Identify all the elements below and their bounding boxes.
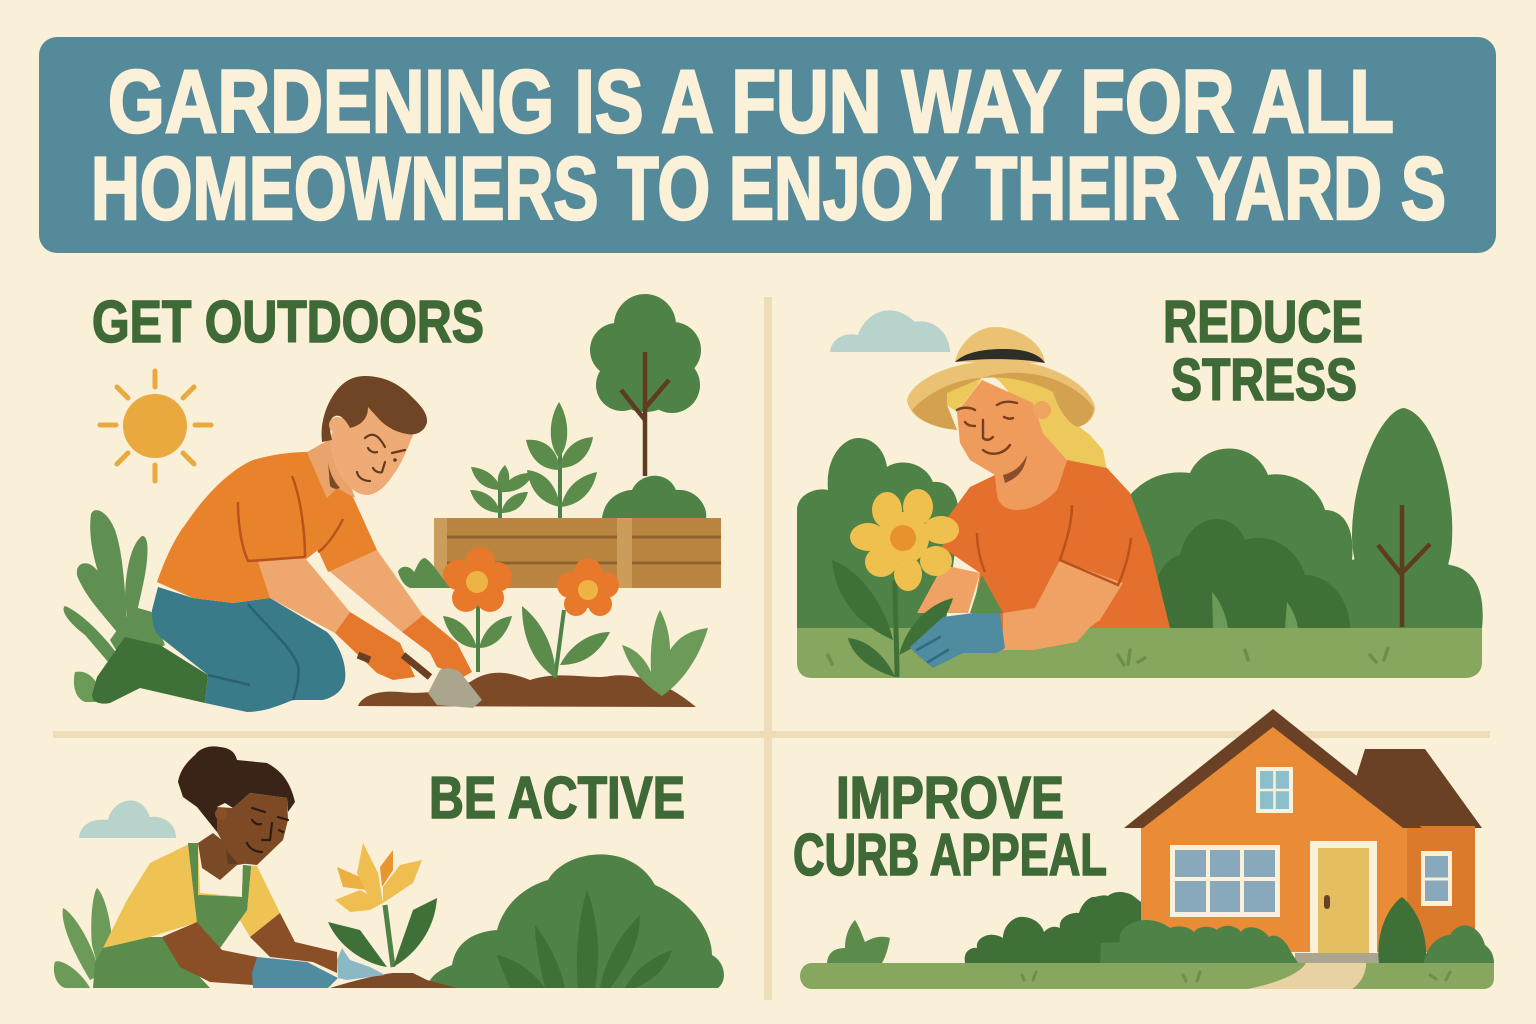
side window [1421,851,1452,906]
far arm [328,550,423,632]
heading: improve curb appeal [793,765,1107,888]
panel: reduce stress [797,289,1483,678]
panel: get outdoors [64,289,721,712]
hair [322,376,427,442]
neck [307,438,355,498]
icon: gardener woman [907,327,1170,650]
icon: orange flowers [443,547,619,678]
icon: bushes left [797,438,959,628]
heading: reduce stress: REDUCE [1163,289,1363,355]
shirt [942,460,1170,628]
far arm [250,913,337,973]
neck shadow [328,462,340,489]
attic window [1256,767,1293,813]
icon: trowel [358,655,482,708]
heading: get outdoors: GET OUTDOORS [92,289,484,355]
shirt creases [238,476,343,561]
icon: house [1124,709,1482,963]
icon: soil mound [358,673,696,707]
icon: bush right [427,854,724,988]
icon: yellow flower [328,843,437,967]
icon: sun [100,371,211,481]
far arm [917,565,980,613]
icon: blue glove [910,613,1005,668]
icon: lawn [800,963,1494,989]
shirt [157,452,377,603]
heading: be active: BE ACTIVE [429,765,685,831]
apron [93,843,251,988]
icon: gardener man [152,376,472,712]
icon: boot [92,637,208,704]
leaf behind glove [970,575,1003,613]
icon: yellow flower [832,489,959,677]
ear [215,808,227,820]
heading: improve curb appeal: CURB APPEAL [793,822,1107,888]
icon: leafy plant left [64,510,165,702]
icon: plants behind raised bed [470,402,597,518]
head [217,793,288,865]
shirt creases [977,505,1131,585]
icon: leaves right [622,610,708,696]
hair front [947,376,1055,412]
heading: reduce stress: STRESS [1171,347,1357,413]
face [247,808,288,852]
icon: path [1248,963,1366,989]
neck shadow [1003,455,1027,483]
ear [1033,401,1051,419]
gloves [335,612,415,680]
main roof [1124,709,1422,828]
hair back [997,378,1107,470]
heading: reduce stress [1163,289,1363,413]
icon: front hedge [1100,920,1298,963]
main window [1170,845,1280,917]
face [357,435,405,481]
panel: be active [54,746,724,988]
blue glove [252,957,338,988]
icon: hedge [965,892,1141,963]
step [1295,953,1381,963]
shirt [103,843,280,948]
icon: grass strip [797,628,1482,678]
icon: cypress tree [1352,408,1452,627]
title banner [39,37,1496,253]
neck shadow [226,850,238,864]
hair [178,746,295,832]
head [330,405,413,495]
icon: tree [590,294,706,518]
right roof [1340,749,1482,828]
heading: improve curb appeal: IMPROVE [836,765,1064,831]
face [957,402,1017,454]
icon: cloud [830,310,950,352]
panel: improve curb appeal [793,709,1494,989]
icon: shrub at door [1378,897,1426,963]
near arm [258,558,350,633]
icon: raised wooden bed [434,518,721,588]
right wing wall [1390,826,1475,952]
sun hat [907,327,1095,430]
door [1310,841,1377,953]
icon: soil [330,973,457,988]
head and neck [957,380,1067,510]
trousers [152,587,345,712]
neck [198,833,250,880]
icon: bush right [1424,925,1494,963]
icon: bushes right [1130,448,1483,628]
main wall [1141,722,1407,952]
icon: gardener woman [93,746,385,988]
near arm [1003,560,1123,650]
icon: small bush by bed [398,558,450,588]
light glove [337,948,385,980]
icon: small bush [827,920,890,963]
near arm [162,922,257,985]
ear [329,417,345,433]
icon: leaves left [54,888,112,988]
icon: cloud [79,801,176,838]
